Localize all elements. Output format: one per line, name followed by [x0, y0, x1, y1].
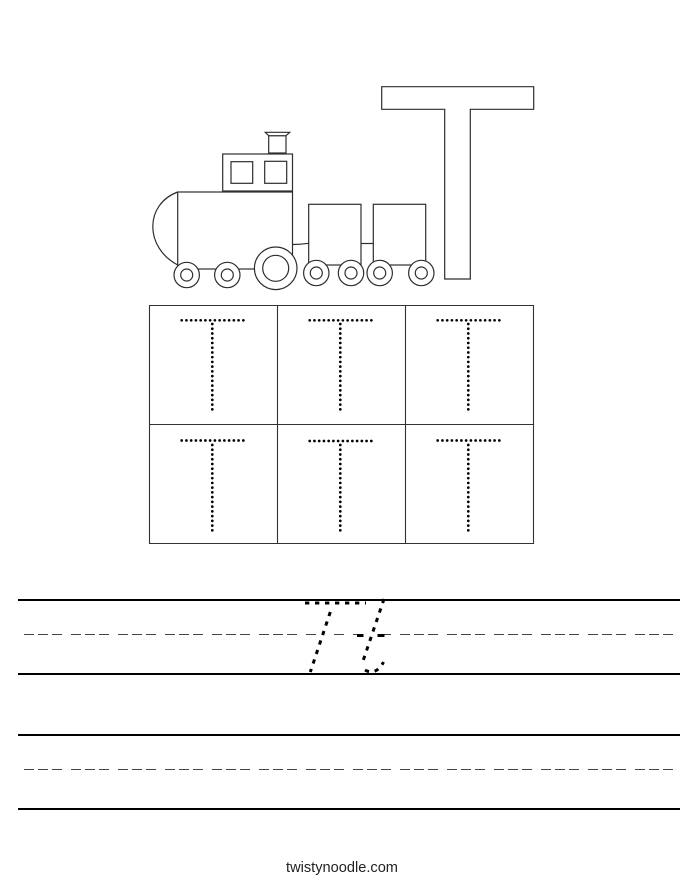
- lowercase t crossbar guide: [357, 634, 384, 637]
- coupling between carriages: [361, 242, 373, 244]
- row two top rule: [18, 734, 680, 736]
- engine chimney: [265, 132, 290, 153]
- row one bottom rule: [18, 673, 680, 675]
- large outlined letter T: [382, 87, 534, 279]
- second carriage: [373, 204, 426, 265]
- capital T guide: [305, 603, 366, 672]
- first carriage: [309, 204, 361, 265]
- grid lines: [150, 306, 534, 544]
- cab window right: [265, 161, 287, 183]
- engine cab: [223, 154, 292, 191]
- dotted T row one column one: [182, 320, 244, 410]
- dotted T row one column three: [438, 320, 500, 410]
- coupling between engine and first carriage: [292, 243, 309, 244]
- dotted T row two column one: [182, 440, 244, 531]
- engine nose: [153, 192, 178, 265]
- footer website text: twistynoodle.com: [286, 860, 398, 876]
- row two bottom rule: [18, 808, 680, 810]
- engine body: [178, 192, 292, 269]
- cab window left: [231, 162, 253, 183]
- traceable cursive Tt guide: [305, 599, 384, 672]
- train wheels: [174, 247, 434, 290]
- dotted T row two column three: [438, 440, 500, 531]
- dotted T row one column two: [310, 320, 372, 410]
- handwriting row one: [18, 599, 680, 675]
- illustration: train and letter T: [153, 87, 534, 290]
- train carriages: [292, 204, 426, 265]
- train engine: [153, 132, 292, 269]
- row two dashed midline: [24, 768, 673, 770]
- handwriting row two: [18, 734, 680, 810]
- dotted T row two column two: [310, 441, 372, 531]
- row one top rule: [18, 599, 680, 601]
- lowercase t guide: [363, 599, 384, 672]
- row one dashed midline: [24, 634, 673, 636]
- tracing grid of six dotted letter T boxes: [150, 306, 534, 544]
